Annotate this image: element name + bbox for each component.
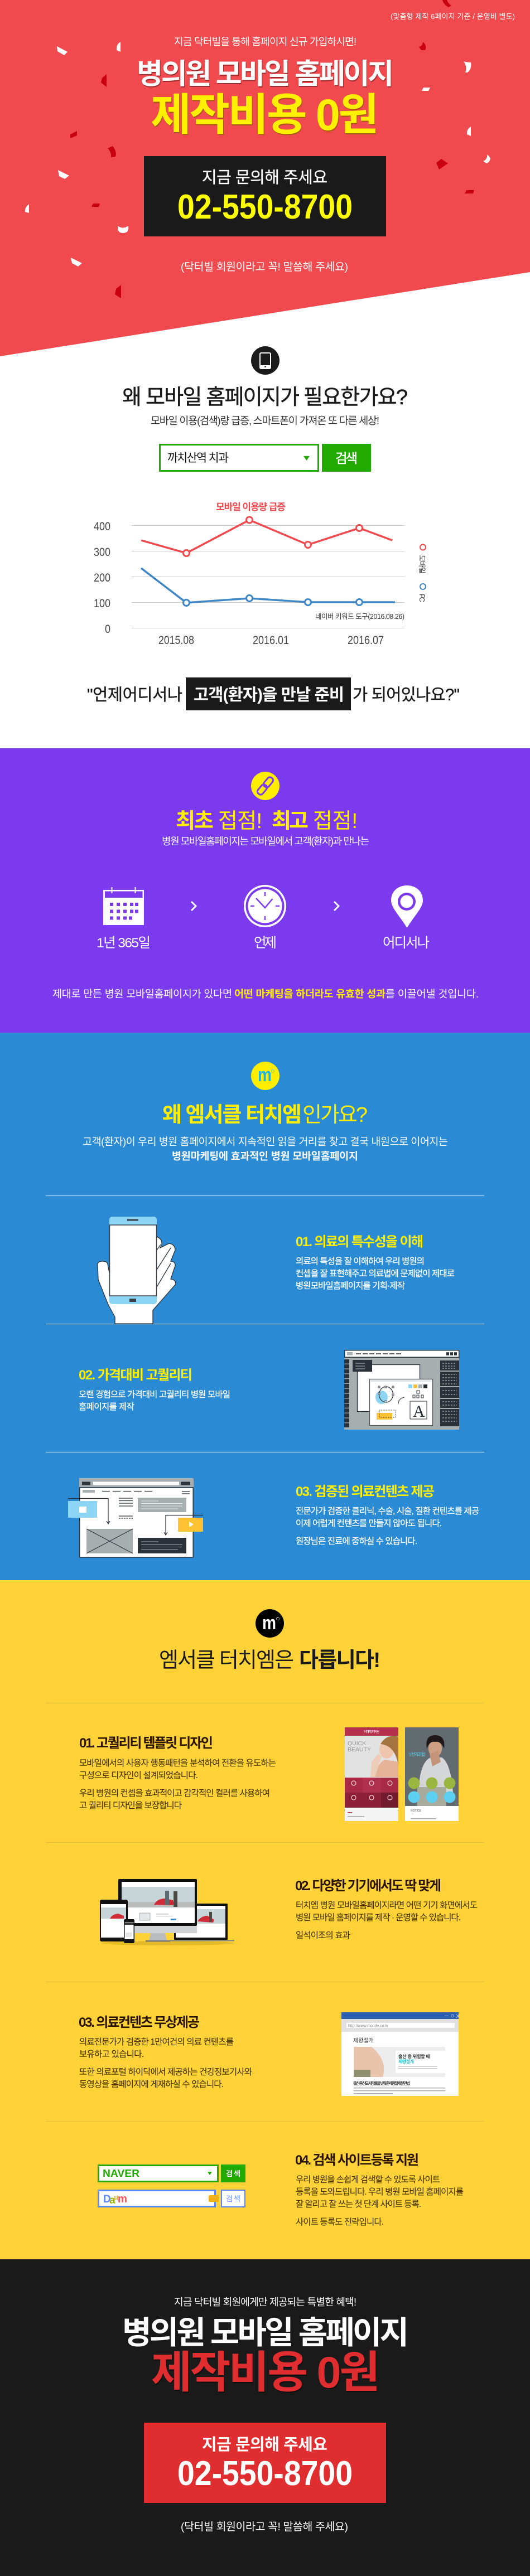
note: (맞춤형 제작 6페이지 기준 / 운영비 별도) xyxy=(391,12,515,21)
illustration: search boxes: m xyxy=(118,2193,127,2205)
hero footnote: (닥터빌 회원이라고 꼭! 말씀해 주세요) xyxy=(181,261,348,273)
heading: 왜 모바일 홈페이지가 필요한가요? xyxy=(122,386,408,409)
line chart: 모바일 xyxy=(418,555,426,574)
line chart: 0 xyxy=(105,623,110,636)
labels: 어디서나 xyxy=(383,935,430,951)
icon: m logo: m xyxy=(258,1064,272,1086)
item 04: 우리 병원을 손쉽게 검색할 수 있도록 사이트 xyxy=(296,2175,440,2185)
icon: map pin xyxy=(391,885,423,928)
item 03: 동영상을 홈페이지에 게재하실 수 있습니다. xyxy=(79,2079,224,2089)
heading: 접점! xyxy=(218,810,262,833)
feature 02: 오랜 경험으로 가격대비 고퀄리티 병원 모바일 xyxy=(79,1389,230,1400)
confetti xyxy=(25,0,490,298)
mobile screenshot: doctor: 남성의 고민을 xyxy=(409,1751,426,1757)
call box: 지금 문의해 주세요 xyxy=(202,169,327,187)
labels xyxy=(97,935,430,951)
heading xyxy=(159,1649,380,1672)
hero intro: 지금 닥터빌을 통해 홈페이지 신규 가입하시면! xyxy=(174,36,356,47)
line chart: PC xyxy=(418,594,426,602)
heading xyxy=(162,1103,368,1127)
title: 병의원 모바일 홈페이지 xyxy=(122,2315,409,2351)
subheading: 병원 모바일홈페이지는 모바일에서 고객(환자)과 만나는 xyxy=(162,836,369,847)
illustration: browser article: http://www.mo.ide.co.kr xyxy=(348,2024,389,2028)
heading: 최초 xyxy=(176,810,214,833)
illustration: wireframe page xyxy=(68,1478,203,1557)
feature 03: 이제 어렵게 컨텐츠를 만들지 않아도 됩니다. xyxy=(296,1518,442,1528)
line chart: 2016.01 xyxy=(253,634,289,647)
quote: "언제어디서나 xyxy=(87,686,182,704)
panel: hero xyxy=(0,0,530,356)
illustration: browser article: 제왕절개 xyxy=(353,2037,374,2044)
panel: touch-m is different xyxy=(0,1580,530,2259)
labels: 언제 xyxy=(254,935,277,951)
feature 01: 의료의 특성을 잘 이해하여 우리 병원의 xyxy=(296,1256,425,1266)
illustration: search boxes: u xyxy=(114,2193,118,2201)
item 03: 의료전문가가 검증한 1만여건의 의료 컨텐츠를 xyxy=(79,2037,234,2047)
illustration: browser article: 출산 중 위험할 때 xyxy=(398,2054,430,2059)
intro text: 병원마케팅에 효과적인 병원 모바일홈페이지 xyxy=(172,1150,358,1162)
panel: why mobile xyxy=(87,346,460,710)
line chart: 2016.07 xyxy=(348,634,384,647)
feature 02 xyxy=(79,1368,230,1412)
panel: closing call to action xyxy=(0,2259,530,2576)
item 04: 잘 알리고 잘 쓰는 첫 단계 사이트 등록. xyxy=(296,2199,421,2209)
illustration: search boxes: 검색 xyxy=(226,2170,240,2178)
item 03 xyxy=(79,2015,252,2089)
hero price: 제작비용 0원 xyxy=(151,90,379,139)
heading: 다릅니다! xyxy=(299,1649,380,1672)
item 01: 모바일에서의 사용자 행동패턴을 분석하여 전환을 유도하는 xyxy=(79,1758,276,1768)
illustration: search boxes: NAVER xyxy=(103,2168,139,2179)
call box: 02-550-8700 xyxy=(177,188,353,226)
item 03: 또한 의료포털 하이닥에서 제공하는 건강정보기사와 xyxy=(79,2067,252,2077)
line chart xyxy=(94,502,426,647)
line chart: 모바일 이용량 급증 xyxy=(216,502,286,512)
call box: 지금 문의해 주세요 xyxy=(202,2435,327,2454)
search box xyxy=(160,444,371,472)
heading: 인가요? xyxy=(302,1103,368,1127)
intro text xyxy=(83,1136,448,1162)
feature 03 xyxy=(296,1484,479,1546)
feature 01: 컨셉을 잘 표현해주고 의료법에 문제없이 제대로 xyxy=(296,1268,455,1279)
arrow xyxy=(191,902,196,911)
illustration: responsive devices xyxy=(100,1879,234,1945)
labels: 1년 365일 xyxy=(97,935,151,951)
feature 01 xyxy=(296,1234,455,1291)
illustration: browser article xyxy=(341,2012,460,2096)
illustration: search boxes: D xyxy=(103,2194,111,2205)
illustration: search boxes: a xyxy=(109,2195,115,2206)
item 01: 01. 고퀄리티 템플릿 디자인 xyxy=(79,1736,213,1751)
item 03: 보유하고 있습니다. xyxy=(79,2049,144,2059)
item 01 xyxy=(79,1736,276,1810)
item 02: 병원 모바일 홈페이지를 제작 · 운영할 수 있습니다. xyxy=(296,1912,461,1923)
heading: 접점! xyxy=(313,810,358,833)
item 04: 사이트 등록도 전략입니다. xyxy=(296,2217,384,2227)
item 02 xyxy=(295,1878,478,1940)
item 01: 고 퀄리티 디자인을 보장합니다 xyxy=(79,1800,182,1810)
item 02: 02. 다양한 기기에서도 딱 맞게 xyxy=(295,1878,441,1894)
line chart: 200 xyxy=(94,572,110,584)
heading: 왜 엠서클 터치엠 xyxy=(162,1103,302,1127)
heading xyxy=(176,810,358,833)
icon: chain link xyxy=(251,772,280,800)
line chart: 100 xyxy=(94,597,110,610)
quote xyxy=(87,677,460,710)
illustration: browser article: 제왕절개 xyxy=(398,2059,414,2064)
intro text: 고객(환자)이 우리 병원 홈페이지에서 지속적인 읽을 거리를 찾고 결국 내원으로 이어지는 xyxy=(83,1136,448,1147)
item 01: 구성으로 디자인이 설계되었습니다. xyxy=(79,1770,198,1780)
illustration: design tool xyxy=(344,1350,459,1430)
quote: 고객(환자)을 만날 준비 xyxy=(194,686,344,704)
arrow xyxy=(334,902,339,911)
search box: 검색 xyxy=(335,451,358,466)
illustration: design tool: A xyxy=(413,1402,425,1421)
icon: phone xyxy=(251,346,280,375)
illustration: search boxes: 검색 xyxy=(226,2195,240,2203)
feature 02: 02. 가격대비 고퀄리티 xyxy=(79,1368,192,1383)
item 02: 일석이조의 효과 xyxy=(296,1930,350,1940)
icon: calendar xyxy=(103,887,144,925)
item 04 xyxy=(295,2153,464,2227)
closing statement xyxy=(52,988,479,1000)
search box: 까치산역 치과 xyxy=(167,452,229,464)
illustration: search boxes xyxy=(98,2165,245,2207)
closing statement: 를 이끌어낼 것입니다. xyxy=(386,988,479,1000)
mobile screenshot: quick beauty xyxy=(345,1727,398,1821)
feature 03: 원장님은 진료에 중하실 수 있습니다. xyxy=(296,1536,417,1546)
feature 01: 01. 의료의 특수성을 이해 xyxy=(296,1234,423,1250)
intro: 지금 닥터빌 회원에게만 제공되는 특별한 혜택! xyxy=(174,2297,356,2308)
price: 제작비용 0원 xyxy=(151,2347,380,2397)
feature 01: 병원모바일홈페이지를 기획·제작 xyxy=(296,1281,405,1291)
footnote: (닥터빌 회원이라고 꼭! 말씀해 주세요) xyxy=(181,2521,348,2533)
hero title: 병의원 모바일 홈페이지 xyxy=(137,58,394,90)
subheading: 모바일 이용(검색)량 급증, 스마트폰이 가져온 또 다른 세상! xyxy=(151,415,379,427)
mobile screenshot: doctor: NOTICE xyxy=(411,1809,422,1813)
heading: 최고 xyxy=(272,810,309,833)
item 04: 등록을 도와드립니다. 우리 병원 모바일 홈페이지를 xyxy=(296,2187,464,2197)
mobile screenshot: doctor xyxy=(405,1727,459,1821)
icon: m logo xyxy=(256,1609,284,1638)
icon: m logo xyxy=(251,1062,280,1090)
item 04: 04. 검색 사이트등록 지원 xyxy=(295,2153,419,2168)
line chart: 300 xyxy=(94,546,110,559)
line chart: 네이버 키워드 도구(2016.08.26) xyxy=(315,613,404,621)
feature 03: 03. 검증된 의료컨텐츠 제공 xyxy=(296,1484,435,1499)
mobile screenshot: quick beauty: QUICK xyxy=(348,1740,366,1747)
illustration: browser article: 출산 중 산모 사망률을 낮춰 준 제왕절개 분만법 xyxy=(353,2080,410,2086)
closing statement: 어떤 마케팅을 하더라도 유효한 성과 xyxy=(234,988,386,1000)
line chart: 2015.08 xyxy=(158,634,194,647)
call box xyxy=(144,2423,386,2503)
illustration: hand holding phone xyxy=(98,1217,176,1324)
mobile screenshot: quick beauty: 터치피부과의원 xyxy=(364,1730,379,1734)
item 03: 03. 의료컨텐츠 무상제공 xyxy=(79,2015,200,2030)
call box: 02-550-8700 xyxy=(177,2454,353,2493)
panel: why touch-m xyxy=(0,1033,530,1580)
line chart: 400 xyxy=(94,520,110,533)
quote: 가 되어있나요?" xyxy=(353,686,460,704)
panel: first contact xyxy=(0,748,530,1033)
heading: 엠서클 터치엠은 xyxy=(159,1649,294,1672)
item 02: 터치엠 병원 모바일홈페이지라면 어떤 기기 화면에서도 xyxy=(296,1900,478,1910)
mobile screenshot: quick beauty: BEAUTY xyxy=(348,1746,371,1753)
feature 02: 홈페이지를 제작 xyxy=(79,1402,134,1412)
icon: m logo: m xyxy=(262,1613,276,1634)
icon: clock xyxy=(244,885,286,927)
illustration: browser article: ㅡ ㅁ X xyxy=(444,2013,460,2019)
item 01: 우리 병원의 컨셉을 효과적이고 감각적인 컬러를 사용하여 xyxy=(79,1788,270,1798)
feature 03: 전문가가 검증한 클리닉, 수술, 시술, 질환 컨텐츠를 제공 xyxy=(296,1506,479,1516)
closing statement: 제대로 만든 병원 모바일홈페이지가 있다면 xyxy=(52,988,232,1000)
call box xyxy=(144,156,386,236)
